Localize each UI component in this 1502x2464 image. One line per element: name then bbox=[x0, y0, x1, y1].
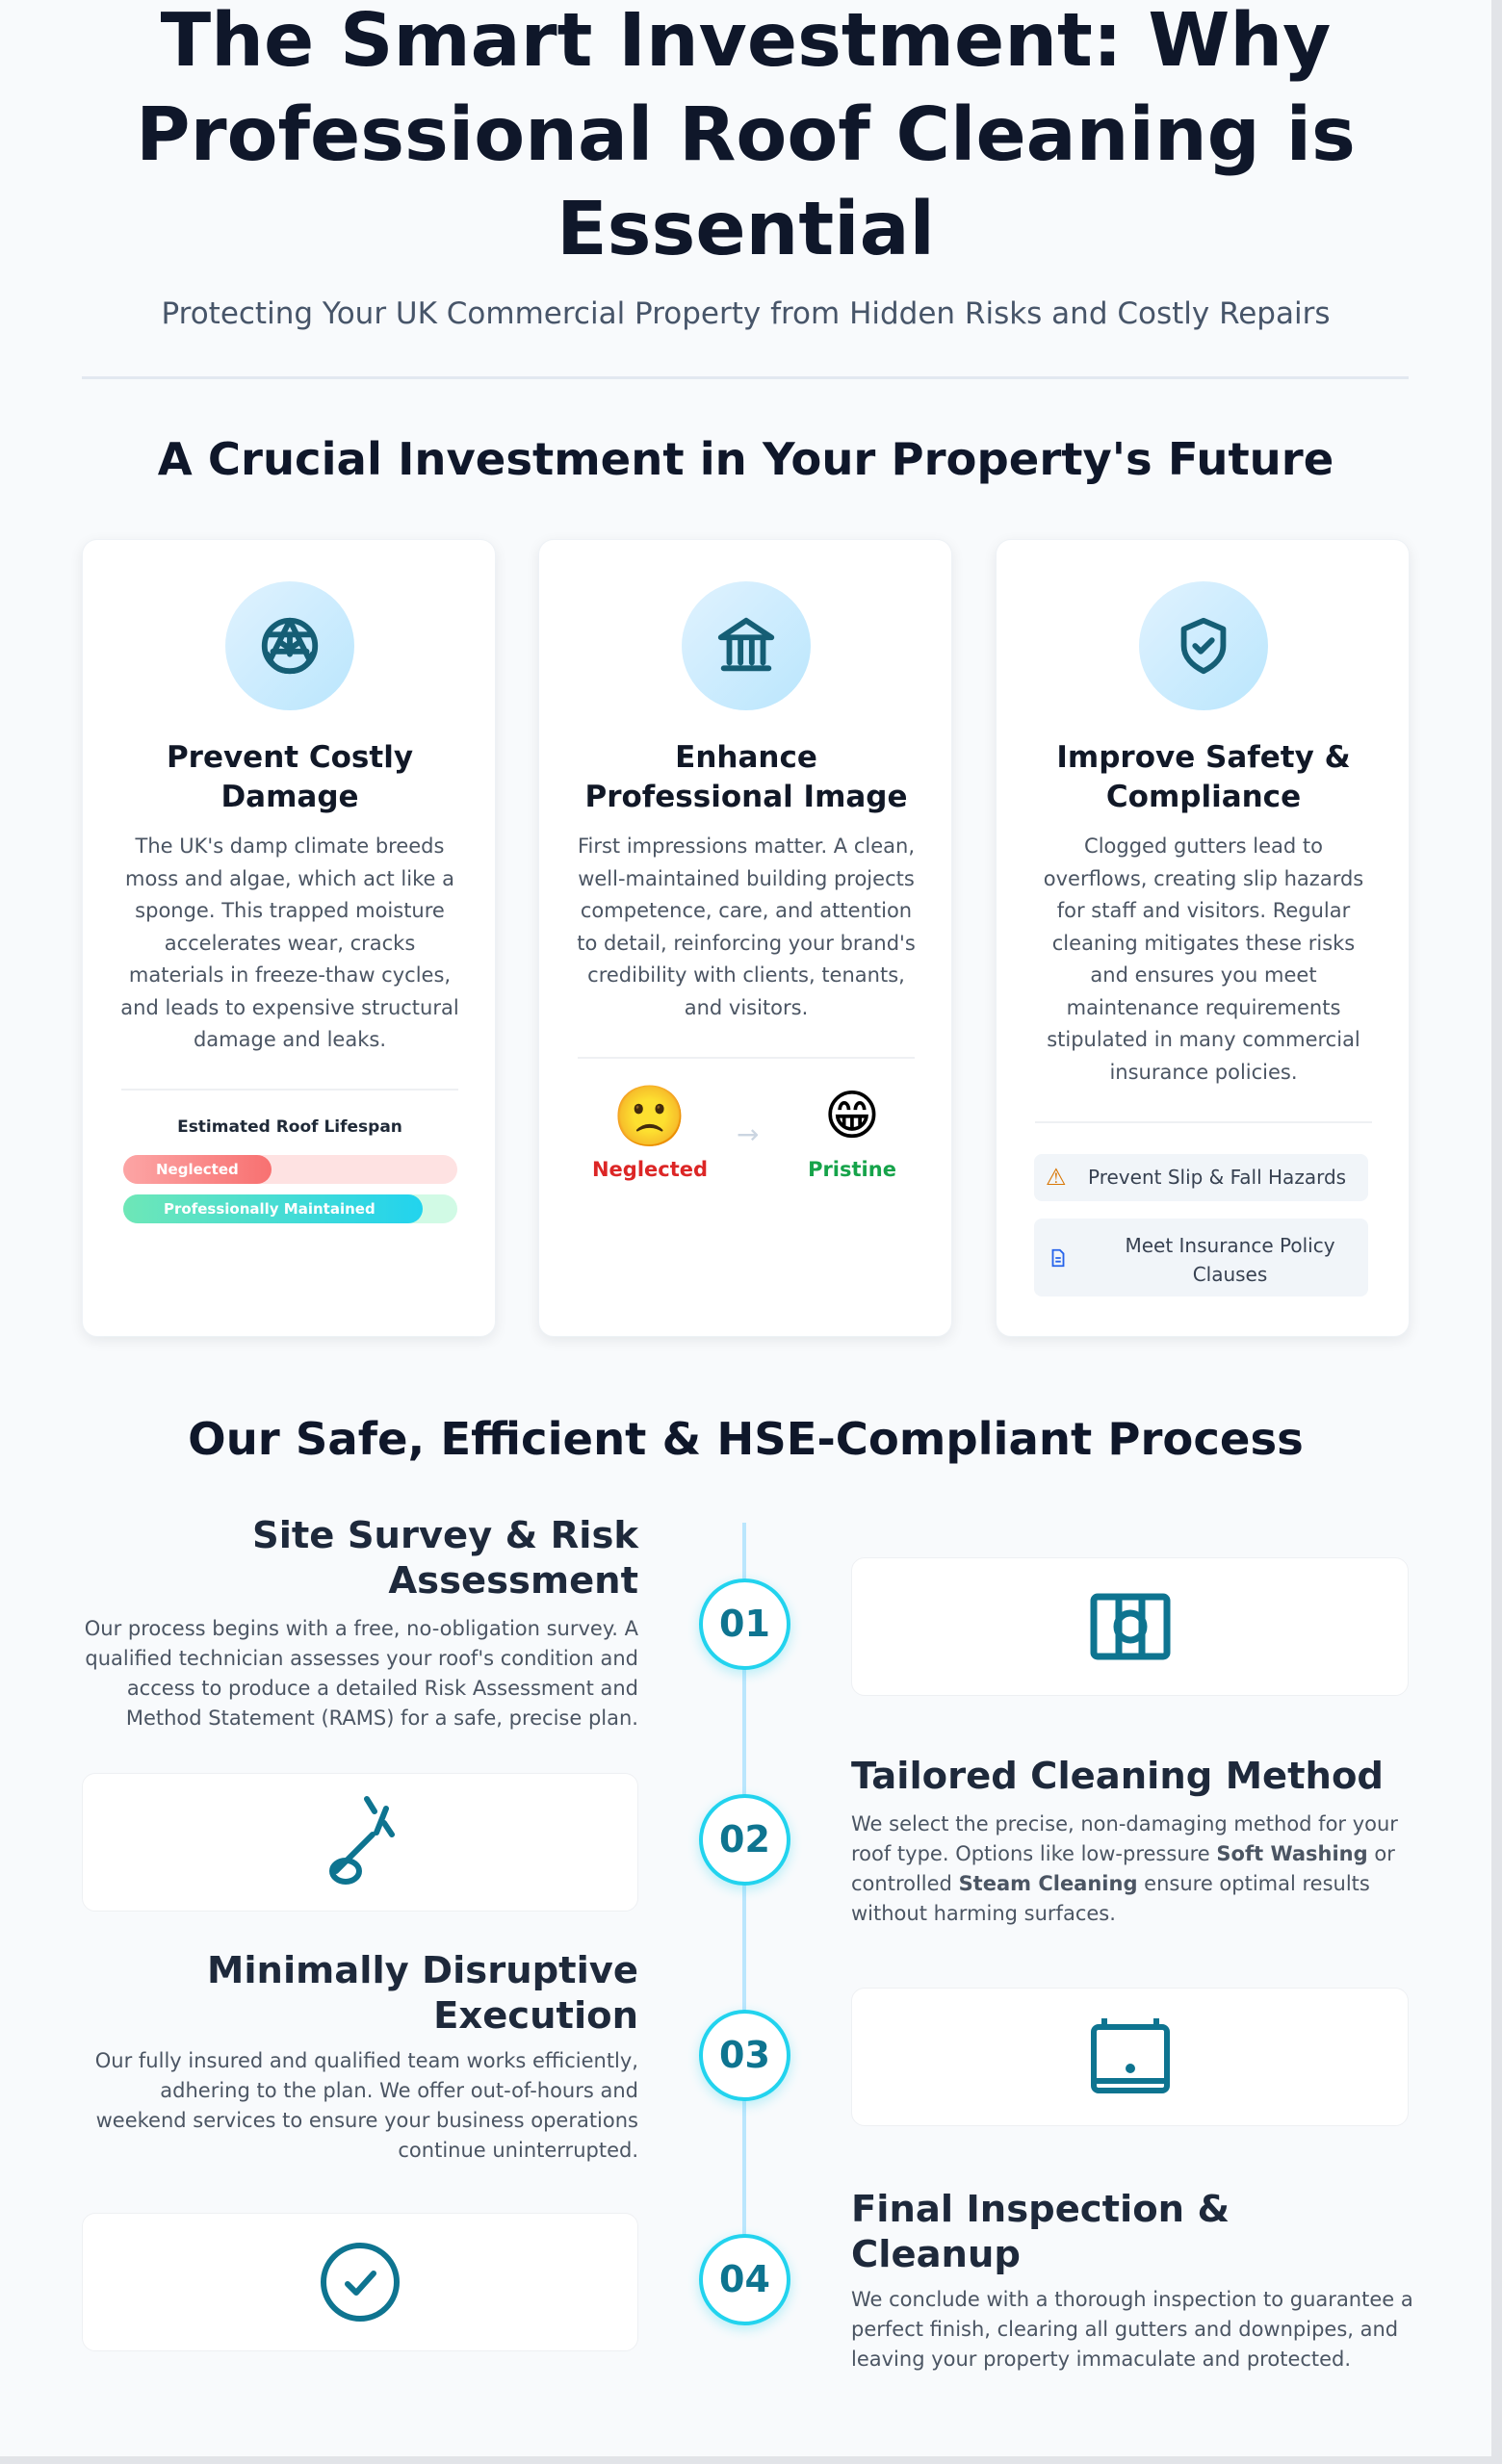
heading: crucial investment: A Crucial Investment in Your Property's Future bbox=[158, 433, 1334, 485]
step 1 number: 01 bbox=[719, 1603, 770, 1645]
before/after emojis bbox=[592, 1081, 896, 1181]
step 2 text bbox=[851, 1755, 1398, 1925]
step 1 number bbox=[699, 1578, 790, 1670]
icon: shield bbox=[1139, 581, 1268, 710]
title bbox=[136, 0, 1356, 272]
heading: process: Our Safe, Efficient & HSE-Compliant Process bbox=[188, 1413, 1304, 1465]
step 3 number bbox=[699, 2010, 790, 2101]
step 2 number bbox=[699, 1794, 790, 1886]
step 4 icon box bbox=[82, 2213, 638, 2351]
card title: Prevent Costly bbox=[167, 740, 413, 775]
badge: slip hazards: ⚠ bbox=[1046, 1164, 1067, 1191]
icon: globe bbox=[225, 581, 354, 710]
step 3 number: 03 bbox=[719, 2034, 770, 2076]
card title: Improve Safety & bbox=[1056, 740, 1351, 775]
step 1 bbox=[85, 1514, 639, 1730]
panel: safety & compliance bbox=[996, 539, 1410, 1337]
badge: slip hazards: Prevent Slip & Fall Hazards bbox=[1088, 1166, 1346, 1189]
card title bbox=[167, 740, 413, 814]
badge: slip hazards bbox=[1034, 1154, 1368, 1201]
before/after emojis: 🙁 bbox=[612, 1081, 687, 1151]
step 1: Our process begins with a free, no-obligation survey. A qualified technician assesses your roof's condition and access to produce a detailed Risk Assessment and Method Statement (RAMS) for a safe, precise plan. bbox=[85, 1617, 638, 1730]
step 3 text: Our fully insured and qualified team works efficiently, adhering to the plan. We offer out-of-hours and weekend services to ensure your business operations continue uninterrupted. bbox=[95, 2049, 638, 2162]
before/after emojis: 😁 bbox=[824, 1085, 880, 1147]
step 1: Site Survey & Risk bbox=[252, 1514, 638, 1557]
panel: prevent costly damage bbox=[82, 539, 496, 1337]
step 2 text: Tailored Cleaning Method bbox=[851, 1755, 1384, 1798]
card title: Damage bbox=[220, 780, 359, 814]
title: Professional Roof Cleaning is bbox=[136, 92, 1356, 178]
step 2 text: We select the precise, non-damaging method for your roof type. Options like low-pressure Soft Washing or controlled Steam Cleaning ensure optimal results without harming surfaces. bbox=[851, 1812, 1398, 1925]
icon: bank bbox=[682, 581, 811, 710]
title: The Smart Investment: Why bbox=[161, 0, 1331, 84]
lifespan chart: Professionally Maintained bbox=[164, 1200, 376, 1218]
card title: Enhance bbox=[675, 740, 817, 775]
card title bbox=[1056, 740, 1351, 814]
step 3 text: Minimally Disruptive bbox=[207, 1949, 638, 1992]
step 1 icon box bbox=[851, 1557, 1409, 1696]
step 4 number bbox=[699, 2234, 790, 2325]
step 4 text: Final Inspection & bbox=[851, 2188, 1230, 2231]
title: Essential bbox=[557, 187, 935, 272]
step 3 icon box bbox=[851, 1988, 1409, 2126]
step 2 icon box bbox=[82, 1773, 638, 1912]
card title: Compliance bbox=[1106, 780, 1301, 814]
badge: insurance: Clauses bbox=[1193, 1263, 1267, 1286]
step 3 text: Execution bbox=[433, 1994, 638, 2038]
panel: professional image bbox=[538, 539, 952, 1337]
before/after emojis: → bbox=[737, 1118, 759, 1150]
badge: insurance: Meet Insurance Policy bbox=[1125, 1234, 1335, 1257]
card text: First impressions matter. A clean, well-maintained building projects competence, care, and attention to detail, reinforcing your brand's credibility with clients, tenants, and visitors. bbox=[577, 834, 916, 1018]
card title bbox=[584, 740, 908, 814]
card text: The UK's damp climate breeds moss and algae, which act like a sponge. This trapped moisture accelerates wear, cracks materials in freeze-thaw cycles, and leads to expensive structural damage and leaks. bbox=[120, 834, 459, 1051]
lifespan chart: Estimated Roof Lifespan bbox=[177, 1117, 402, 1137]
step 4 text bbox=[851, 2188, 1413, 2371]
timeline line bbox=[742, 1523, 746, 2280]
before/after emojis: Neglected bbox=[592, 1158, 708, 1181]
step 1: Assessment bbox=[388, 1559, 638, 1603]
step 4 number: 04 bbox=[719, 2258, 770, 2300]
step 4 text: We conclude with a thorough inspection to guarantee a perfect finish, clearing all gutters and downpipes, and leaving your property immaculate and protected. bbox=[851, 2288, 1413, 2371]
badge: insurance bbox=[1034, 1219, 1368, 1296]
subtitle: Protecting Your UK Commercial Property from Hidden Risks and Costly Repairs bbox=[161, 296, 1331, 331]
before/after emojis: Pristine bbox=[808, 1158, 896, 1181]
step 4 text: Cleanup bbox=[851, 2233, 1021, 2276]
step 2 number: 02 bbox=[719, 1818, 770, 1861]
step 3 text bbox=[95, 1949, 638, 2162]
lifespan chart bbox=[123, 1117, 457, 1223]
lifespan chart: Neglected bbox=[156, 1161, 239, 1178]
card title: Professional Image bbox=[584, 780, 908, 814]
card text: Clogged gutters lead to overflows, creating slip hazards for staff and visitors. Regular cleaning mitigates these risks and ensures you meet maintenance requirements stipulated in many commercial insurance policies. bbox=[1044, 834, 1363, 1084]
